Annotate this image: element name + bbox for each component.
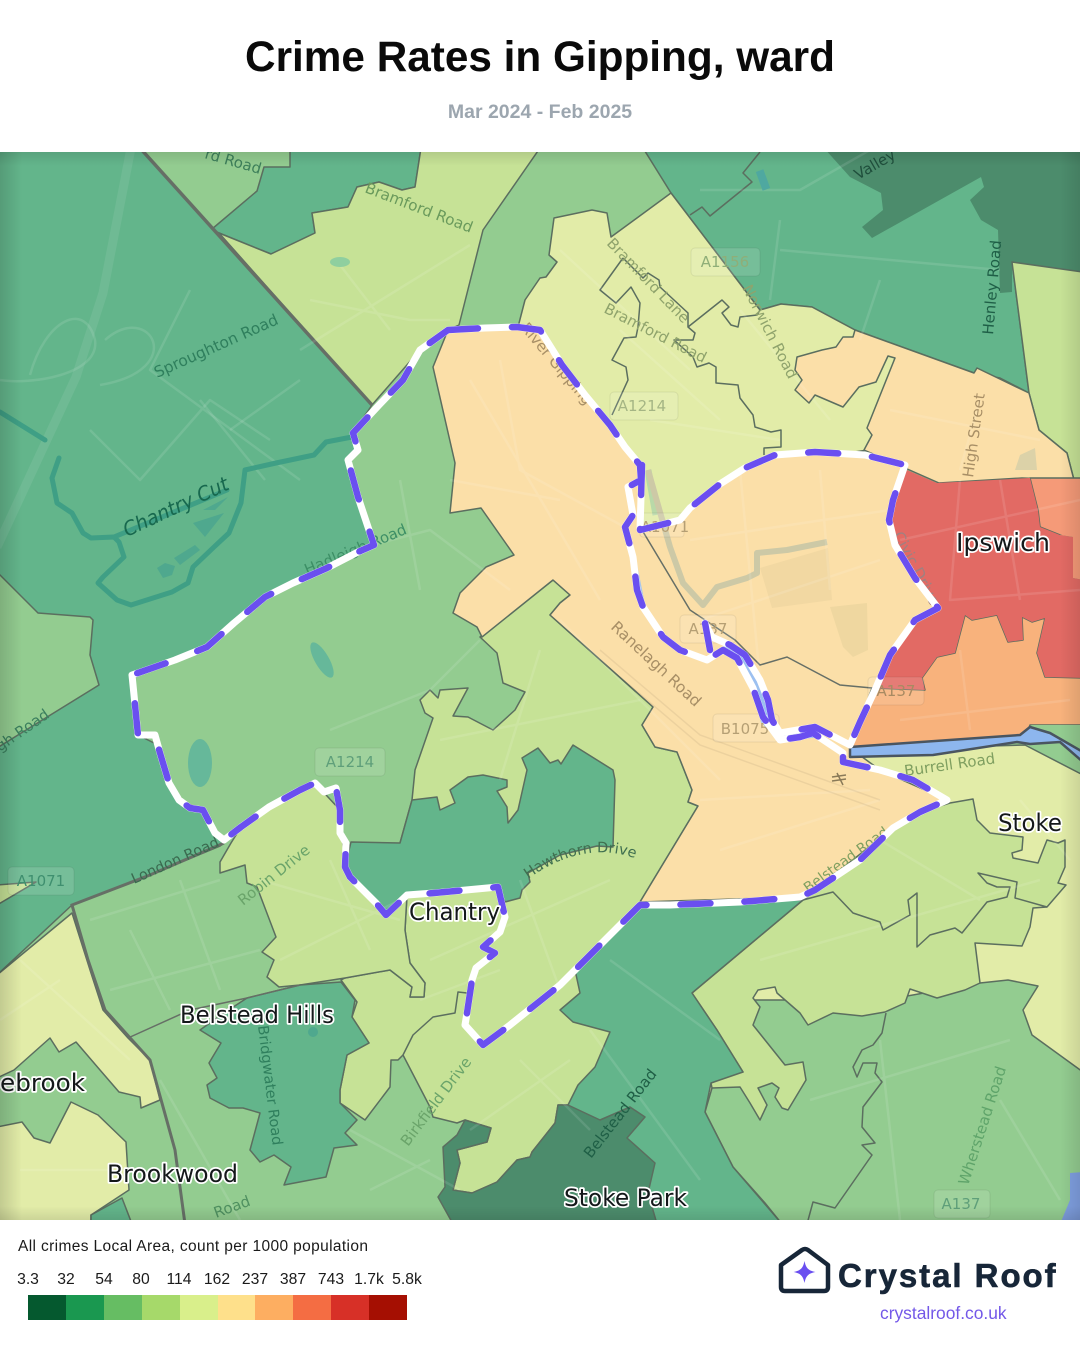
place labels: Chantry — [409, 898, 500, 926]
place labels: Ipswich — [956, 528, 1050, 557]
road labels: Bramford Road — [363, 179, 475, 237]
river Gipping — [633, 557, 1080, 762]
road number shields: A1071 — [17, 872, 65, 890]
legend: 237 — [242, 1271, 268, 1288]
road labels — [0, 152, 1010, 1220]
legend: 387 — [280, 1271, 306, 1288]
road labels: Burrell Road — [903, 749, 996, 780]
legend: 5.8k — [392, 1271, 422, 1288]
road number shields: B1075 — [721, 720, 769, 738]
base mid-green area — [0, 152, 1080, 1220]
road number shields: A1071 — [641, 518, 689, 536]
road labels: River Gipping — [517, 319, 596, 408]
road labels: High Street — [959, 392, 989, 479]
road labels: Sproughton Road — [151, 311, 281, 382]
road labels: Henley Road — [979, 239, 1005, 335]
road number shields: A1214 — [326, 753, 374, 771]
road labels: Norwich Road — [738, 282, 801, 382]
park and building blocks in town centre — [648, 470, 868, 657]
place labels: ebrook — [0, 1069, 85, 1097]
road number shields: A1156 — [701, 253, 749, 271]
legend colour scale — [28, 1295, 407, 1320]
road labels: Ranelagh Road — [607, 618, 705, 710]
place labels: Brookwood — [107, 1160, 238, 1188]
road labels: Belstead Road — [801, 824, 892, 896]
road number shields: A137 — [877, 682, 915, 700]
choropleth regions — [0, 148, 1080, 1224]
website url: crystalroof.co.uk — [880, 1303, 1007, 1323]
place labels: Stoke — [998, 809, 1062, 837]
map edge vignette — [0, 152, 1080, 1220]
legend ticks — [17, 1271, 422, 1288]
legend: 743 — [318, 1271, 344, 1288]
date range subtitle: Mar 2024 - Feb 2025 — [448, 101, 632, 123]
title: Crime Rates in Gipping, ward — [245, 33, 835, 80]
legend: 162 — [204, 1271, 230, 1288]
legend — [17, 1238, 422, 1320]
road labels: London Road — [129, 835, 222, 888]
road labels: Hawthorn Drive — [523, 842, 636, 878]
major road lines — [72, 148, 872, 1224]
legend: 54 — [95, 1271, 113, 1288]
road labels: Robin Drive — [234, 841, 313, 909]
road labels: Hadleigh Road — [302, 520, 409, 579]
road number shields: A137 — [942, 1195, 980, 1213]
road number shields — [8, 248, 990, 1218]
road labels: Bramford Road — [601, 300, 710, 367]
road number shields: A1214 — [618, 397, 666, 415]
boundary white casing — [132, 327, 947, 1045]
icon: railway station — [832, 773, 846, 785]
road labels: Belstead Road — [580, 1065, 660, 1161]
legend: 32 — [57, 1271, 75, 1288]
legend: 114 — [166, 1271, 192, 1288]
Chantry Cut river — [0, 412, 352, 605]
road labels: Civic Drive — [889, 528, 943, 608]
boundary purple dashes — [132, 327, 947, 1045]
road labels: Chantry Cut — [119, 471, 233, 542]
place labels: Stoke Park — [564, 1184, 687, 1212]
place labels — [0, 528, 1062, 1212]
Alderman Canal — [648, 470, 827, 605]
legend: 3.3 — [17, 1271, 39, 1288]
legend: 1.7k — [354, 1271, 384, 1288]
ward boundary: Gipping — [132, 327, 947, 1045]
logo wordmark: Crystal Roof — [838, 1257, 1058, 1294]
choropleth map — [0, 152, 1080, 1220]
faint street network — [0, 148, 1080, 1220]
logo: Crystal Roof — [778, 1246, 1058, 1323]
road number shields: A137 — [689, 620, 727, 638]
internal area boundary lines — [403, 152, 1047, 1224]
road labels: Wherstead Road — [955, 1064, 1010, 1187]
ponds — [157, 169, 1037, 1037]
place labels: Belstead Hills — [180, 1001, 334, 1029]
road labels: Bramford Lane — [603, 234, 693, 327]
legend: 80 — [132, 1271, 150, 1288]
bottom-right water — [1060, 1172, 1080, 1224]
road labels: Bridgwater Road — [254, 1025, 285, 1146]
railway — [600, 650, 880, 810]
icon: house with star — [778, 1246, 830, 1294]
legend title: All crimes Local Area, count per 1000 population — [18, 1238, 368, 1255]
road labels: Birkfield Drive — [397, 1054, 475, 1149]
